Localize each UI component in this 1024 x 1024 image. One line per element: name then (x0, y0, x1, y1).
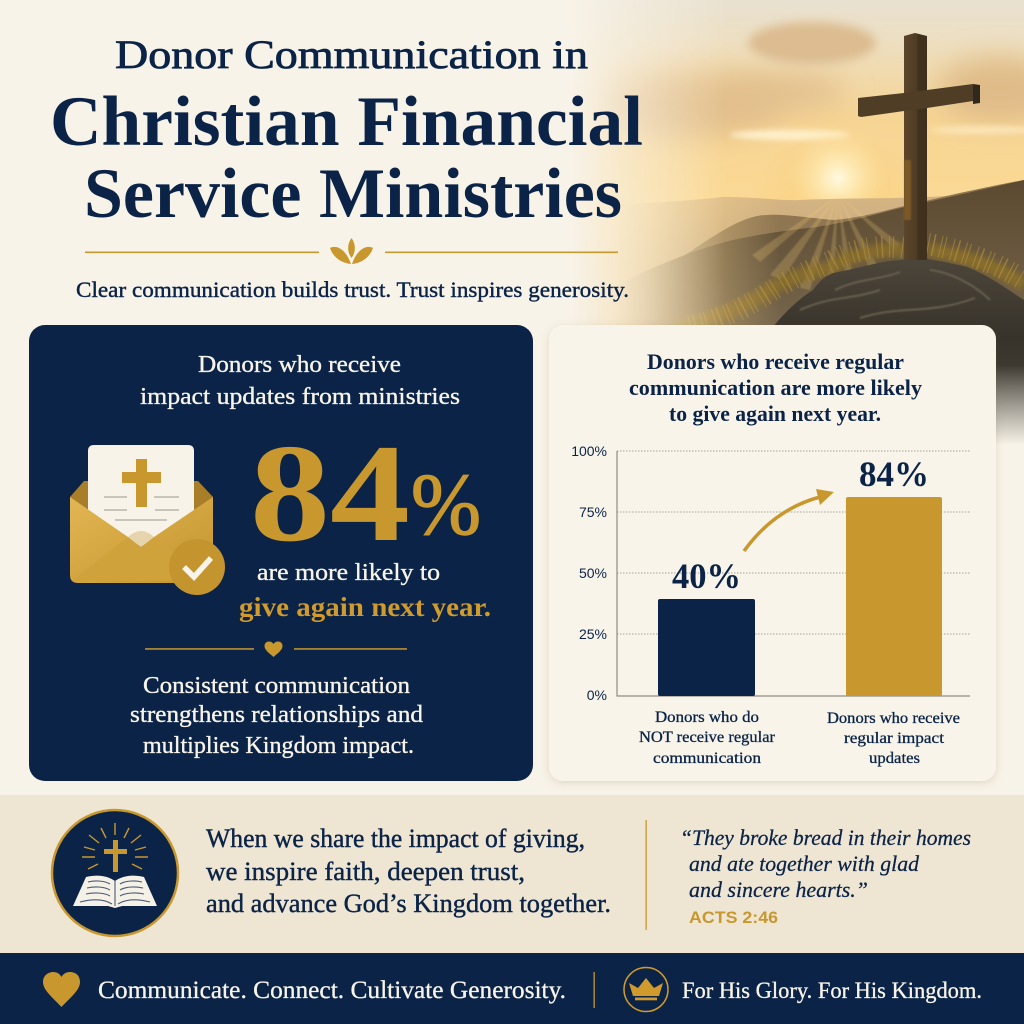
title: Service Ministries (84, 155, 622, 233)
y axis labels: 0% (587, 687, 607, 703)
bar: regular updates 84% (846, 454, 942, 696)
chart heading: Donors who receive regular (647, 349, 904, 374)
panel: bar chart card (549, 325, 996, 781)
big number 84%: % (411, 457, 481, 554)
scripture quote: and ate together with glad (689, 851, 920, 876)
subtitle: Clear communication builds trust. Trust inspires generosity. (76, 277, 629, 302)
bar: no regular communication 40% (658, 556, 755, 696)
statistic caption: are more likely to (257, 560, 440, 586)
message text: When we share the impact of giving, (206, 824, 585, 853)
y axis labels: 100% (571, 443, 607, 459)
clouds (595, 22, 1024, 140)
x label: donors with updates (827, 710, 960, 767)
bar chart (571, 443, 970, 767)
x label: donors with updates: regular impact (844, 730, 945, 747)
panel: navy statistic card (29, 325, 533, 781)
sunrise photo with cross on a hill (540, 0, 1024, 445)
heart divider (145, 642, 407, 657)
card heading: impact updates from ministries (140, 384, 460, 410)
cross (858, 33, 980, 260)
rock (773, 258, 1024, 445)
message text: we inspire faith, deepen trust, (206, 857, 525, 886)
x label: donors with updates: updates (869, 750, 920, 767)
title (50, 32, 643, 233)
big number 84% (250, 416, 481, 571)
title: Christian Financial (50, 83, 643, 161)
chart heading: to give again next year. (669, 401, 881, 426)
card heading (140, 352, 460, 410)
card closing statement: multiplies Kingdom impact. (143, 733, 414, 759)
x label: donors without communication (639, 709, 776, 767)
big number 84%: 84 (250, 416, 410, 571)
footer tagline left: Communicate. Connect. Cultivate Generosity. (98, 977, 566, 1004)
message text: and advance God’s Kingdom together. (206, 889, 611, 918)
photo fade on right strip (540, 365, 1024, 445)
title: Donor Communication in (115, 32, 588, 77)
x label: donors without communication: communication (653, 750, 761, 767)
statistic caption: give again next year. (239, 592, 491, 622)
icon: cross and open book (52, 810, 178, 936)
scripture quote: ACTS 2:46 (689, 908, 778, 927)
y axis labels: 25% (579, 626, 607, 642)
statistic caption (239, 560, 491, 622)
footer tagline right: For His Glory. For His Kingdom. (682, 978, 982, 1003)
x label: donors without communication: Donors who do (655, 709, 759, 726)
icon: gold heart (43, 972, 80, 1007)
x label: donors without communication: NOT receive regular (639, 729, 776, 746)
title divider with leaf ornament (85, 238, 618, 264)
chart heading (629, 349, 922, 426)
bar: regular updates 84%: 84% (859, 454, 929, 494)
panel: message band (0, 795, 1024, 953)
card closing statement (130, 673, 423, 759)
y axis labels: 75% (579, 504, 607, 520)
card closing statement: Consistent communication (143, 673, 410, 699)
card heading: Donors who receive (198, 352, 401, 378)
bar: no regular communication 40%: 40% (672, 556, 741, 596)
x label: donors with updates: Donors who receive (827, 710, 960, 727)
y axis labels (571, 443, 607, 703)
card closing statement: strengthens relationships and (130, 702, 423, 728)
panel: footer bar (0, 953, 1024, 1024)
chart heading: communication are more likely (629, 375, 922, 400)
right grass (928, 244, 1024, 285)
scripture quote: “They broke bread in their homes (680, 825, 971, 850)
icon: crown in circle (624, 968, 668, 1012)
y axis labels: 50% (579, 565, 607, 581)
sun (774, 176, 902, 200)
hills, rays and left grass (633, 180, 1024, 325)
arrow: rise from 40% to 84% (744, 489, 834, 551)
message text (206, 824, 611, 918)
icon: envelope with letter and check (70, 445, 225, 595)
scripture quote: and sincere hearts.” (689, 877, 868, 902)
scripture quote (680, 825, 971, 927)
